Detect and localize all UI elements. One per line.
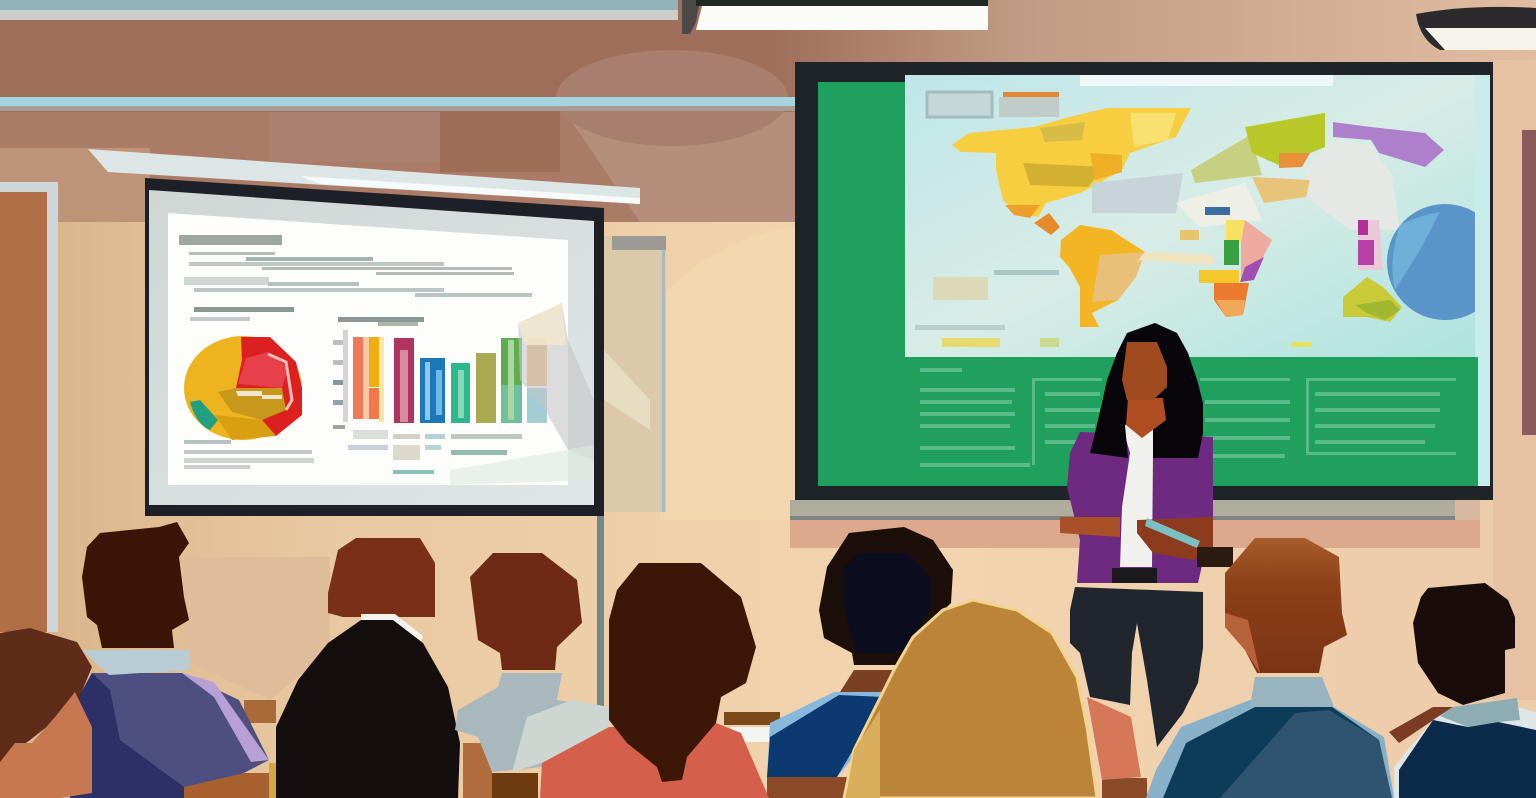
student 6: dark hair blue shirt xyxy=(767,527,953,777)
student 3: dark hair foreground xyxy=(276,538,460,798)
audience xyxy=(0,522,1536,798)
presenter left arm xyxy=(1060,517,1120,537)
map continents xyxy=(915,92,1503,347)
door on the left xyxy=(0,182,58,632)
projector glare xyxy=(450,303,650,485)
pie chart xyxy=(184,336,302,440)
presenter xyxy=(1060,323,1233,747)
display text panels xyxy=(920,368,1456,467)
presenter neck xyxy=(1126,398,1166,438)
presenter shirt xyxy=(1120,420,1167,567)
student 9: far right xyxy=(1389,583,1536,798)
student 2: blue shirt xyxy=(70,522,269,798)
left projection screen xyxy=(145,178,666,706)
slide text lines xyxy=(179,235,532,469)
presenter hair xyxy=(1090,323,1203,458)
display tray xyxy=(790,500,1480,548)
presenter face xyxy=(1122,342,1167,400)
presenter right arm and marker xyxy=(1137,517,1233,567)
student 5: coral shirt xyxy=(540,563,769,798)
side board behind screen xyxy=(604,236,666,512)
desk edges xyxy=(184,700,1147,798)
student far left xyxy=(0,628,92,798)
student 7: coral shoulder xyxy=(1087,697,1141,780)
ceiling light strips xyxy=(0,0,1536,204)
student 7: blonde hair xyxy=(844,600,1097,798)
presenter jacket xyxy=(1067,432,1213,583)
student 8: teal jacket xyxy=(1146,538,1394,798)
bar chart xyxy=(333,330,547,474)
presenter belt xyxy=(1112,568,1157,583)
student 4: white shirt xyxy=(455,553,609,772)
right wall display xyxy=(790,62,1503,548)
presenter trousers xyxy=(1070,587,1203,747)
